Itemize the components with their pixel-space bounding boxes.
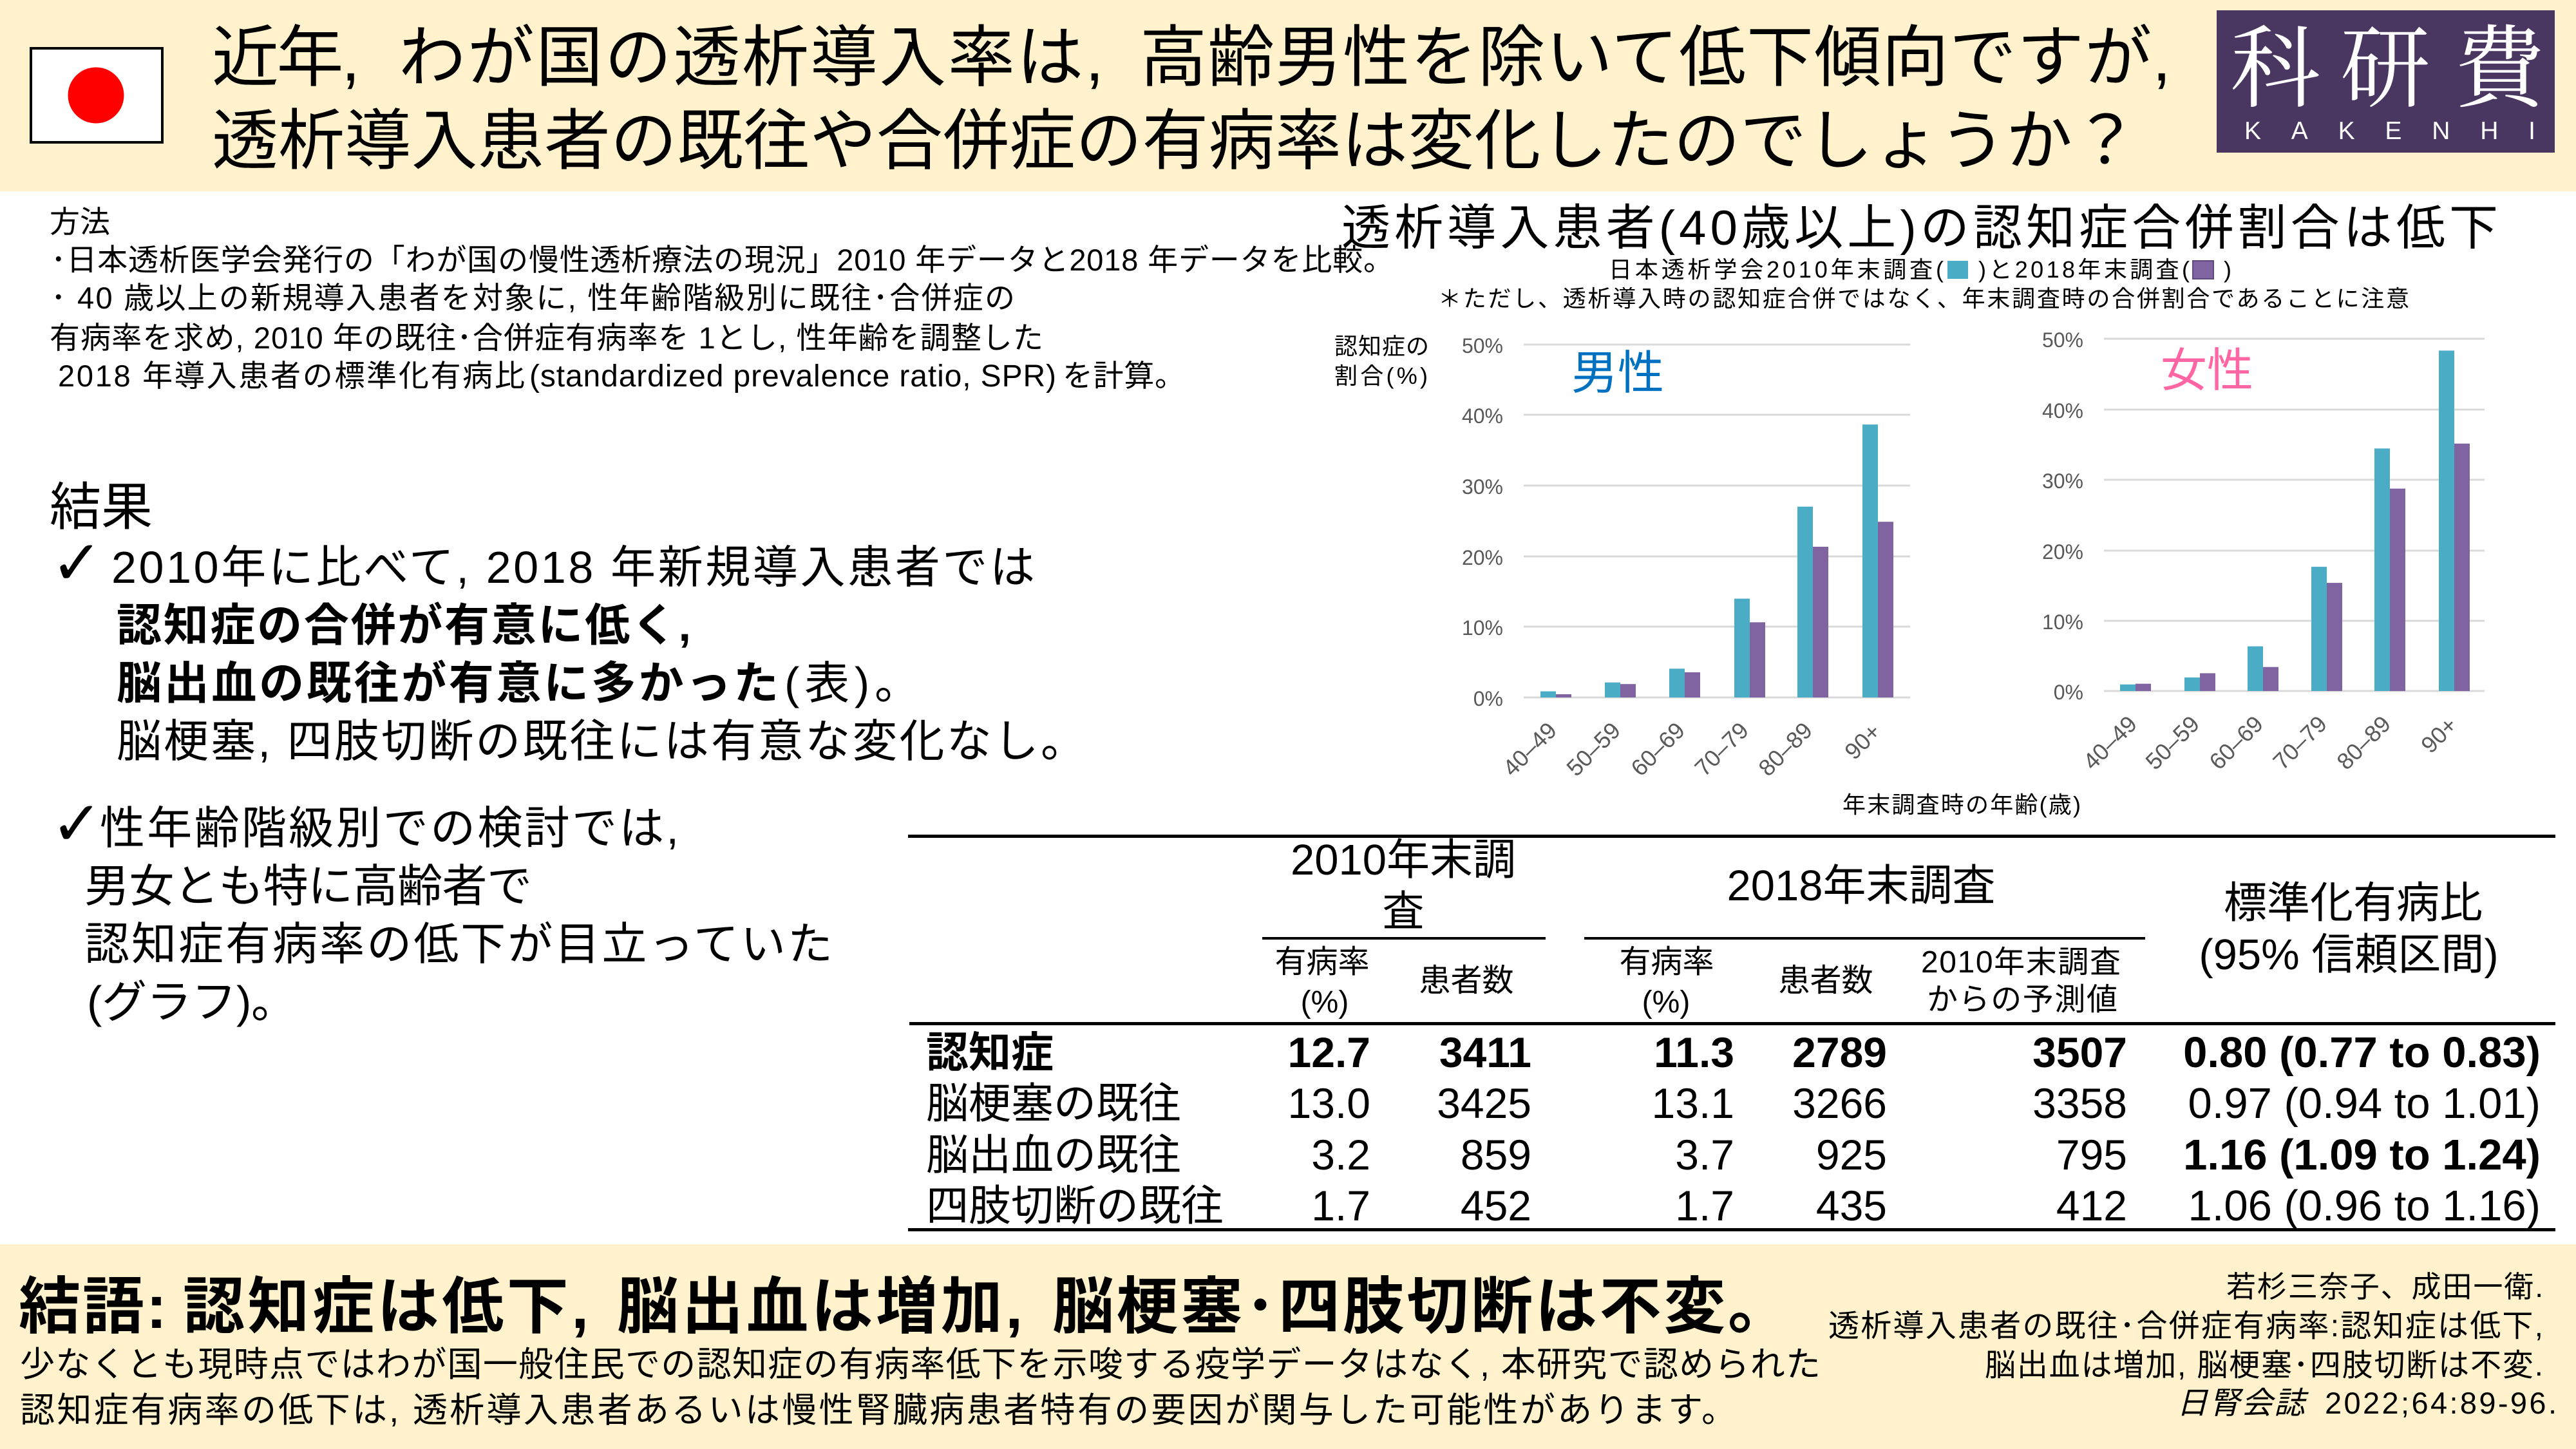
y axis title: [1334, 333, 1429, 389]
bar chart: male: 40%: [1462, 404, 1503, 428]
title: 高齢男性を除いて低下傾向ですが,: [1140, 21, 2171, 95]
title: 近年,: [212, 21, 360, 95]
table row: amputation: [926, 1182, 2541, 1230]
y axis title: 認知症の: [1334, 333, 1429, 359]
label: male: 男性: [1571, 348, 1664, 399]
table header: 2010: 有病率: [1274, 945, 1370, 980]
table row: dementia: 3507: [2032, 1028, 2127, 1076]
logo: KAKENHI: KAKENHI: [2244, 117, 2535, 145]
icon: check mark: ✓: [51, 527, 102, 599]
header band: [0, 0, 2576, 191]
table header: 2018: 患者数: [1778, 963, 1873, 998]
bar chart: male: 50–59: [1561, 717, 1625, 781]
bar chart: female: 0%: [2054, 681, 2083, 704]
methods text: 有病率を求め, 2010 年の既往･合併症有病率を 1とし, 性年齢を調整した: [50, 321, 1043, 355]
y axis title: 割合(%): [1334, 363, 1428, 389]
bar chart: male: 40–49: [1497, 717, 1562, 781]
table row: cerebral infarction: 3358: [2032, 1079, 2127, 1127]
table row: cerebral hemorrhage: 3.7: [1675, 1131, 1734, 1179]
label: female: 女性: [2161, 345, 2253, 397]
conclusion body: 少なくとも現時点ではわが国一般住民での認知症の有病率低下を示唆する疫学データはなく, 本研究で認められた: [20, 1345, 1821, 1384]
results text: first finding: 認知症の合併が有意に低く,: [117, 600, 691, 650]
methods text: ･ 40 歳以上の新規導入患者を対象に, 性年齢階級別に既往･合併症の: [51, 281, 1015, 315]
conclusion heading: 認知症は低下,: [183, 1273, 589, 1341]
icon: Japanese flag: [31, 48, 162, 142]
table row: cerebral hemorrhage: 脳出血の既往: [926, 1131, 1181, 1179]
table row: cerebral hemorrhage: 795: [2056, 1131, 2127, 1179]
table header: 2018: (%): [1642, 985, 1690, 1019]
citation: [1828, 1270, 2557, 1421]
table row: cerebral hemorrhage: 3.2: [1311, 1131, 1370, 1179]
table row: amputation: 1.06 (0.96 to 1.16): [2188, 1182, 2541, 1230]
conclusion heading: 脳出血は増加,: [617, 1273, 1023, 1341]
bar chart: male: 30%: [1462, 475, 1503, 498]
chart note: ＊ただし、透析導入時の認知症合併ではなく、年末調査時の合併割合であることに注意: [1438, 285, 2409, 312]
citation: 透析導入患者の既往･合併症有病率:認知症は低下,: [1828, 1309, 2543, 1343]
logo: KAKENHI: 費: [2455, 0, 2549, 126]
conclusion heading: [19, 1273, 1790, 1341]
table row: amputation: 452: [1461, 1182, 1531, 1229]
table header: 2018: 2018年末調査: [1727, 862, 1996, 910]
table row: cerebral infarction: 3266: [1792, 1079, 1887, 1127]
table header: 2010: 患者数: [1419, 963, 1514, 998]
table row: amputation: 412: [2056, 1182, 2127, 1229]
results heading: 結果: [50, 478, 153, 536]
chart legend: )と2018年末調査(: [1978, 256, 2190, 283]
table row: cerebral infarction: 13.0: [1288, 1079, 1370, 1127]
logo: KAKENHI: 科: [2230, 0, 2320, 126]
table header: SPR: 標準化有病比: [2224, 879, 2483, 927]
results text: first finding: 脳梗塞, 四肢切断の既往には有意な変化なし。: [117, 716, 1086, 766]
table header: 2018: 有病率: [1619, 945, 1714, 980]
logo: KAKENHI: 研: [2340, 0, 2430, 126]
bar chart: female: 60–69: [2204, 710, 2268, 775]
bar chart: female: 50–59: [2140, 710, 2204, 775]
citation: 日腎会誌: [2177, 1387, 2309, 1421]
conclusion heading: 結語:: [19, 1273, 167, 1341]
table header: 2010: 査: [1382, 887, 1425, 934]
table row: cerebral infarction: 13.1: [1652, 1079, 1734, 1127]
bar chart: male: [1462, 334, 1910, 781]
bar chart: male: 80–89: [1753, 717, 1817, 781]
methods text: [50, 205, 1394, 393]
citation: 脳出血は増加, 脳梗塞･四肢切断は不変.: [1985, 1349, 2543, 1383]
methods text: (standardized prevalence ratio, SPR): [529, 359, 1056, 393]
table header: 2018: からの予測値: [1927, 983, 2117, 1017]
chart heading: 透析導入患者(40歳以上)の認知症合併割合は低下: [1341, 201, 2498, 256]
bar chart: male: 70–79: [1689, 717, 1754, 781]
logo: KAKENHI: [2217, 0, 2555, 153]
results text: second finding: [51, 788, 833, 1027]
bar chart: female: 80–89: [2331, 710, 2396, 775]
table row: dementia: 0.80 (0.77 to 0.83): [2183, 1028, 2541, 1077]
chart legend: [1609, 256, 2231, 283]
table row: cerebral hemorrhage: 859: [1461, 1131, 1531, 1179]
table header: SPR: (95% 信頼区間): [2199, 931, 2499, 979]
table header: 2010: [1274, 836, 1516, 1019]
table row: amputation: 四肢切断の既往: [926, 1182, 1224, 1229]
table header: SPR: [2199, 879, 2499, 979]
x axis title: 年末調査時の年齢(歳): [1842, 791, 2081, 818]
bar chart: female: 30%: [2042, 469, 2083, 493]
methods text: ･日本透析医学会発行の「わが国の慢性透析療法の現況」2010 年データと2018 年データを比較。: [51, 243, 1394, 277]
bar chart: female: 20%: [2042, 540, 2083, 564]
footer band: [0, 1244, 2576, 1449]
table row: dementia: [926, 1028, 2541, 1077]
results text: first finding: 2010年に比べて, 2018 年新規導入患者では: [111, 542, 1035, 592]
results text: second finding: 性年齢階級別での検討では,: [100, 803, 679, 853]
methods text: を計算。: [1063, 359, 1185, 393]
chart legend: ): [2224, 256, 2231, 283]
table row: cerebral infarction: 脳梗塞の既往: [926, 1079, 1181, 1127]
table row: amputation: 1.7: [1311, 1182, 1370, 1229]
bar chart: male: 20%: [1462, 546, 1503, 569]
table row: amputation: 435: [1816, 1182, 1887, 1229]
bar chart: female: 10%: [2042, 611, 2083, 634]
conclusion body: [20, 1345, 1821, 1430]
bar chart: female: 50%: [2042, 328, 2083, 352]
table row: dementia: 11.3: [1654, 1028, 1734, 1076]
table row: cerebral hemorrhage: [926, 1131, 2541, 1179]
results text: first finding: 脳出血の既往が有意に多かった: [117, 658, 779, 708]
bar chart: female: 40–49: [2078, 710, 2142, 775]
bar chart: male: 50%: [1462, 334, 1503, 357]
title: 透析導入患者の既往や合併症の有病率は変化したのでしょうか？: [212, 104, 2139, 178]
table row: dementia: 12.7: [1288, 1028, 1370, 1076]
table row: dementia: 3411: [1439, 1028, 1531, 1076]
table row: dementia: 2789: [1792, 1028, 1887, 1076]
citation: 2022;64:89-96.: [2325, 1386, 2557, 1420]
table row: cerebral infarction: [926, 1079, 2541, 1128]
table row: cerebral infarction: 0.97 (0.94 to 1.01): [2188, 1079, 2541, 1128]
methods text: 方法: [50, 205, 110, 239]
table row: cerebral hemorrhage: 1.16 (1.09 to 1.24): [2183, 1131, 2541, 1179]
title: [212, 21, 2171, 178]
results text: first finding: [51, 527, 1086, 766]
conclusion body: 認知症有病率の低下は, 透析導入患者あるいは慢性腎臓病患者特有の要因が関与した可能性があります。: [20, 1391, 1736, 1430]
results text: second finding: 認知症有病率の低下が目立っていた: [84, 919, 833, 969]
chart legend: 日本透析学会2010年末調査(: [1609, 256, 1944, 283]
icon: check mark: ✓: [51, 788, 102, 860]
results text: second finding: (グラフ)。: [87, 977, 296, 1027]
bar chart: male: 0%: [1473, 687, 1503, 710]
table row: dementia: 認知症: [926, 1028, 1054, 1076]
bar chart: female: 90+: [2416, 712, 2462, 758]
title: わが国の透析導入率は,: [399, 21, 1104, 95]
conclusion heading: 脳梗塞･四肢切断は不変。: [1052, 1273, 1790, 1341]
table header: 2010: 2010年末調: [1291, 836, 1516, 884]
table: [908, 835, 2555, 1231]
table row: cerebral infarction: 3425: [1437, 1079, 1531, 1127]
bar chart: female: 70–79: [2268, 710, 2332, 775]
table header: 2010: (%): [1301, 985, 1349, 1019]
results text: first finding: (表)。: [784, 658, 920, 708]
table header: 2018: 2010年末調査: [1921, 945, 2121, 980]
bar chart: male: 60–69: [1625, 717, 1690, 781]
bar chart: female: 40%: [2042, 399, 2083, 422]
bar chart: male: 90+: [1839, 718, 1886, 764]
results text: second finding: 男女とも特に高齢者で: [84, 861, 532, 911]
citation: 若杉三奈子、成田一衛.: [2226, 1270, 2543, 1303]
bar chart: male: 10%: [1462, 616, 1503, 639]
table row: amputation: 1.7: [1675, 1182, 1734, 1229]
table header: 2018: [1619, 862, 2121, 1019]
methods text: 2018 年導入患者の標準化有病比: [58, 359, 525, 393]
table row: cerebral hemorrhage: 925: [1816, 1131, 1887, 1179]
bar chart: female: [2042, 328, 2485, 775]
